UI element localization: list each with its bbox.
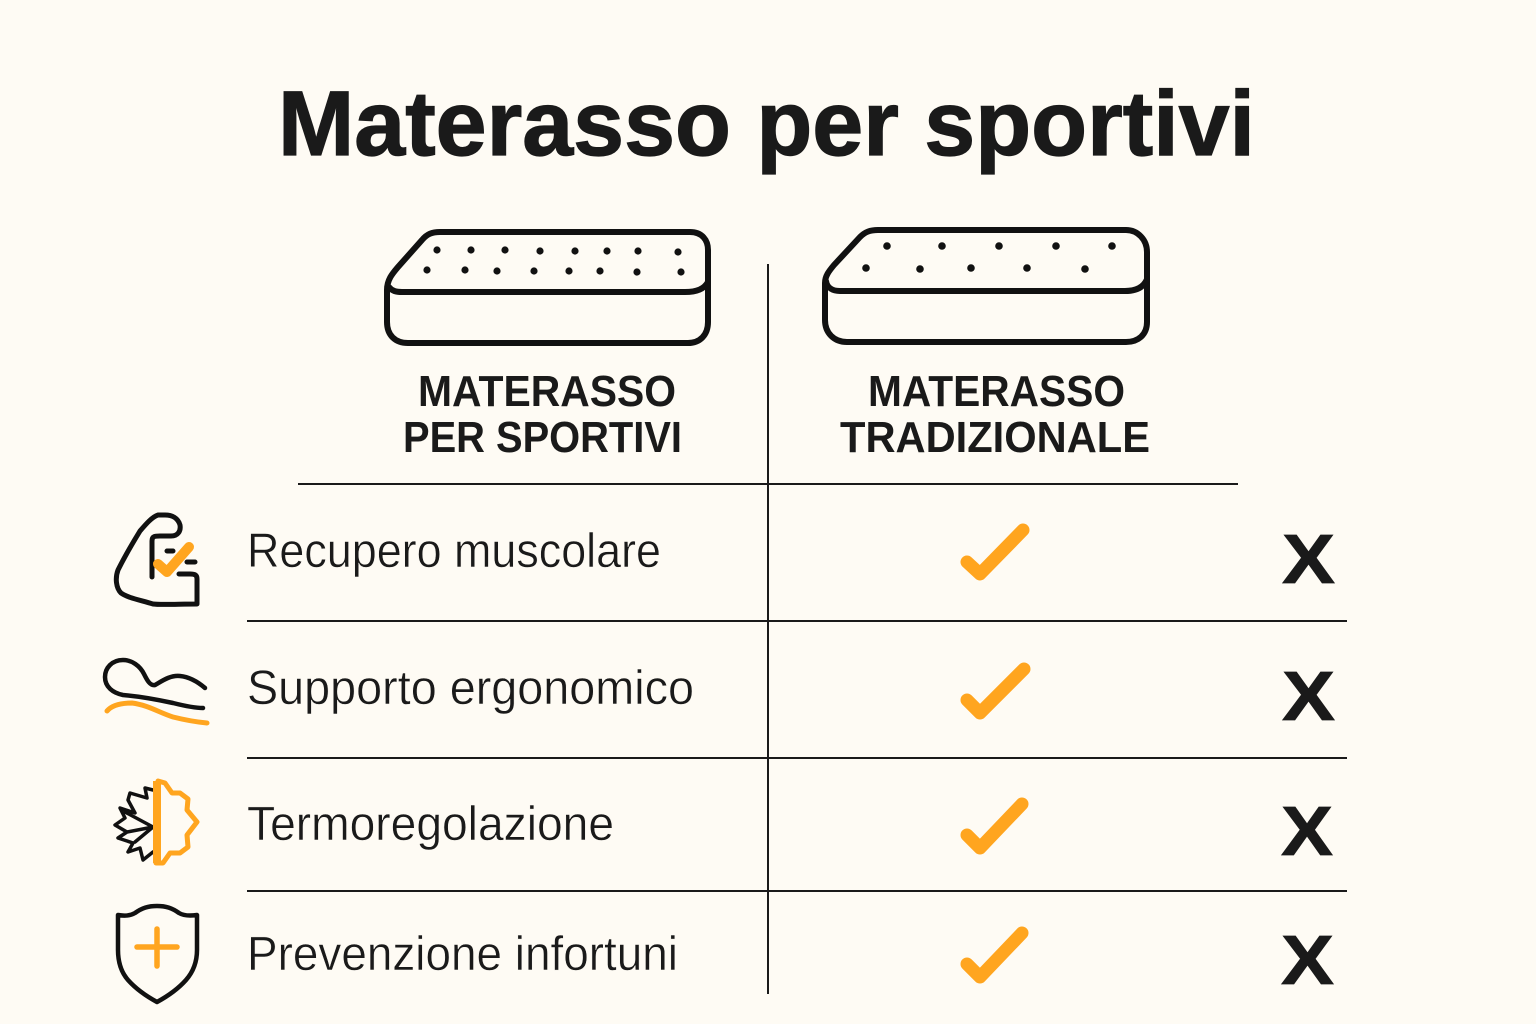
- icon: body on support: [105, 660, 207, 723]
- row: termoregolazione: [115, 781, 1333, 870]
- heading: materasso tradizionale: [840, 367, 1150, 462]
- check: [967, 669, 1024, 713]
- heading: materasso per sportivi: PER SPORTIVI: [403, 413, 682, 462]
- row: prevenzione infortuni: [118, 906, 1334, 1002]
- label: Recupero muscolare: [247, 525, 661, 578]
- icon: sports mattress: [387, 232, 708, 343]
- title: Materasso per sportivi: [278, 73, 1255, 175]
- cross: X: [1281, 921, 1334, 999]
- label: Prevenzione infortuni: [247, 928, 678, 981]
- row: supporto ergonomico: [105, 657, 1335, 735]
- heading: materasso tradizionale: MATERASSO: [868, 367, 1125, 416]
- cross: X: [1281, 792, 1333, 870]
- heading: materasso tradizionale: TRADIZIONALE: [840, 413, 1150, 462]
- label: Supporto ergonomico: [247, 662, 694, 715]
- check: [967, 530, 1023, 574]
- icon: traditional mattress: [825, 230, 1147, 342]
- icon: cold and warm half: [115, 781, 197, 863]
- row: recupero muscolare: [116, 515, 1335, 604]
- check: [967, 804, 1022, 848]
- icon: flexed arm with check: [116, 515, 197, 604]
- icon: shield with plus: [118, 906, 197, 1002]
- check: [967, 933, 1022, 977]
- label: Termoregolazione: [247, 798, 614, 851]
- heading: materasso per sportivi: [403, 367, 682, 462]
- cross: X: [1282, 657, 1335, 735]
- heading: materasso per sportivi: MATERASSO: [418, 367, 676, 416]
- cross: X: [1282, 520, 1335, 598]
